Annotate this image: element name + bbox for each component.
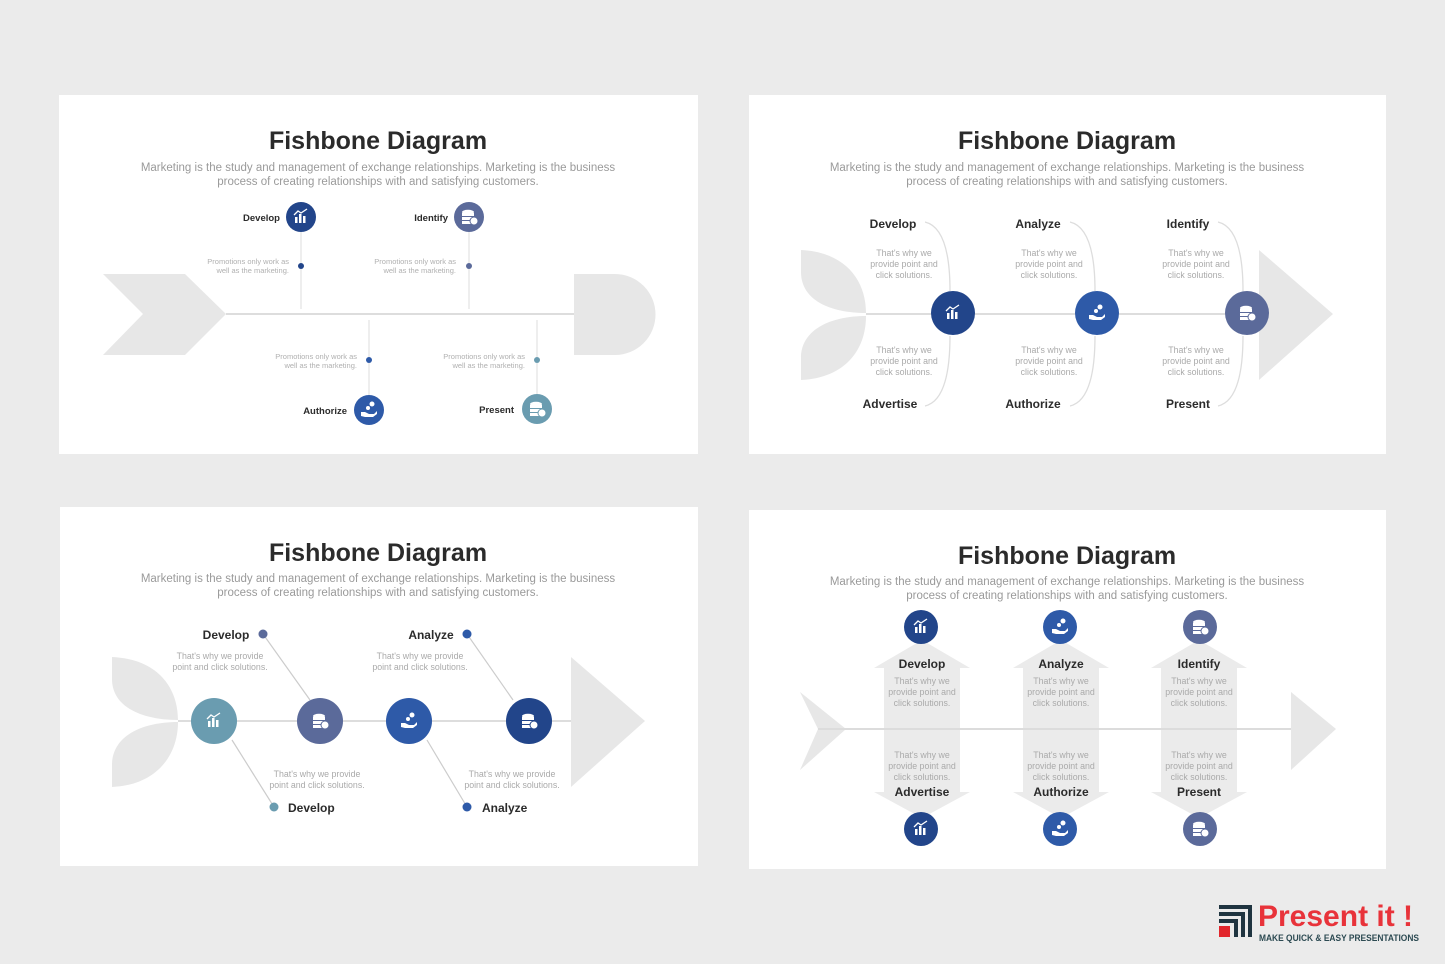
logo: MAKE QUICK & EASY PRESENTATIONS: [1259, 933, 1419, 943]
column: Identify/Present: provide point and: [1165, 687, 1233, 697]
fish head: [1291, 692, 1336, 770]
column: Identify/Present: That's why we: [1171, 676, 1227, 686]
title: Fishbone Diagram: [269, 539, 487, 567]
node: Analyze/Authorize: [1005, 217, 1119, 411]
bone: Develop: [207, 202, 316, 309]
node: Identify/Present: That's why we: [1168, 248, 1224, 258]
node: Identify/Present: click solutions.: [1168, 367, 1224, 377]
node: Develop/Advertise: That's why we: [876, 248, 932, 258]
fish head: [574, 274, 656, 355]
column: Identify/Present: click solutions.: [1171, 698, 1227, 708]
nodes: [191, 698, 552, 744]
labels: Analyze bottom: That's why we provide: [469, 769, 555, 779]
bone: Authorize: Authorize: [303, 406, 347, 417]
column: Analyze/Authorize: click solutions.: [1033, 772, 1089, 782]
panel: bottom-right fishbone: [749, 510, 1386, 869]
node: Analyze/Authorize: That's why we: [1021, 345, 1077, 355]
bone: Present: well as the marketing.: [451, 361, 525, 370]
node: Identify/Present: Identify: [1167, 217, 1210, 231]
node: Identify/Present: provide point and: [1162, 356, 1230, 366]
node: Analyze/Authorize: Analyze: [1015, 217, 1061, 231]
column: Develop/Advertise: provide point and: [888, 687, 956, 697]
labels: Analyze top: That's why we provide: [377, 651, 463, 661]
column: Develop/Advertise: provide point and: [888, 761, 956, 771]
bone: Identify: well as the marketing.: [382, 266, 456, 275]
labels: Analyze bottom: [462, 769, 560, 815]
column: Analyze/Authorize: That's why we: [1033, 750, 1089, 760]
labels: Develop bottom: [269, 769, 365, 815]
subtitle: process of creating relationships with and satisfying customers.: [906, 176, 1228, 188]
column: Analyze/Authorize: [1013, 610, 1109, 846]
title: Fishbone Diagram: [269, 127, 487, 155]
bone: Develop: Promotions only work as: [207, 257, 289, 266]
node: Develop/Advertise: click solutions.: [876, 270, 932, 280]
fish tail: [800, 692, 846, 770]
bone: Present: Present: [479, 405, 515, 416]
bone: Authorize: Promotions only work as: [275, 352, 357, 361]
labels: Develop top: [172, 628, 268, 672]
panel: top-right fishbone: [749, 95, 1386, 454]
subtitle: process of creating relationships with and satisfying customers.: [217, 587, 539, 599]
labels: Develop top: Develop: [203, 628, 249, 642]
labels: Develop top: That's why we provide: [177, 651, 263, 661]
column: Develop/Advertise: Develop: [899, 657, 945, 671]
bone: Authorize: [275, 320, 384, 425]
column: Analyze/Authorize: Authorize: [1033, 785, 1089, 799]
node: Develop/Advertise: provide point and: [870, 356, 938, 366]
labels: Analyze top: Analyze: [408, 628, 454, 642]
column: Identify/Present: That's why we: [1171, 750, 1227, 760]
bone: Authorize: well as the marketing.: [283, 361, 357, 370]
subtitle: Marketing is the study and management of exchange relationships. Marketing is the business: [830, 576, 1304, 588]
bone: Develop: well as the marketing.: [215, 266, 289, 275]
logo: [1219, 900, 1419, 943]
node: Develop/Advertise: Develop: [870, 217, 916, 231]
column: Develop/Advertise: That's why we: [894, 750, 950, 760]
subtitle: Marketing is the study and management of exchange relationships. Marketing is the business: [830, 162, 1304, 174]
subtitle: Marketing is the study and management of exchange relationships. Marketing is the business: [141, 573, 615, 585]
column: Develop/Advertise: click solutions.: [894, 698, 950, 708]
fish head: [1259, 250, 1333, 380]
node: Develop/Advertise: provide point and: [870, 259, 938, 269]
labels: Develop top: point and click solutions.: [172, 662, 268, 672]
column: Analyze/Authorize: click solutions.: [1033, 698, 1089, 708]
labels: Analyze top: [372, 628, 472, 672]
bone: Identify: Identify: [414, 213, 449, 224]
node: Identify/Present: click solutions.: [1168, 270, 1224, 280]
title: Fishbone Diagram: [958, 127, 1176, 155]
node: Identify/Present: [1162, 217, 1269, 411]
node: Analyze/Authorize: provide point and: [1015, 259, 1083, 269]
bone: Develop: Develop: [243, 213, 280, 224]
column: Analyze/Authorize: provide point and: [1027, 761, 1095, 771]
labels: Develop bottom: Develop: [288, 801, 335, 815]
column: Analyze/Authorize: Analyze: [1038, 657, 1084, 671]
node: Develop/Advertise: click solutions.: [876, 367, 932, 377]
bone: Present: Promotions only work as: [443, 352, 525, 361]
node: Develop/Advertise: Advertise: [863, 397, 918, 411]
node: Analyze/Authorize: Authorize: [1005, 397, 1061, 411]
node: Analyze/Authorize: provide point and: [1015, 356, 1083, 366]
fish tail leaves: [112, 657, 178, 787]
labels: Develop bottom: point and click solutions.: [269, 780, 365, 790]
node: Analyze/Authorize: That's why we: [1021, 248, 1077, 258]
node: Identify/Present: Present: [1166, 397, 1210, 411]
column: Identify/Present: Identify: [1178, 657, 1221, 671]
node: Analyze/Authorize: click solutions.: [1021, 270, 1077, 280]
node: Identify/Present: provide point and: [1162, 259, 1230, 269]
panel: bottom-left fishbone: [60, 507, 698, 866]
bone: Identify: [374, 202, 484, 309]
column: Analyze/Authorize: That's why we: [1033, 676, 1089, 686]
bone: Identify: Promotions only work as: [374, 257, 456, 266]
column: Identify/Present: Present: [1177, 785, 1221, 799]
logo: Present it !: [1258, 900, 1413, 933]
column: Identify/Present: click solutions.: [1171, 772, 1227, 782]
column: Analyze/Authorize: provide point and: [1027, 687, 1095, 697]
column: Identify/Present: provide point and: [1165, 761, 1233, 771]
node: Develop/Advertise: That's why we: [876, 345, 932, 355]
fish tail: [103, 274, 226, 355]
labels: Analyze bottom: point and click solutions.: [464, 780, 560, 790]
column: Develop/Advertise: Advertise: [895, 785, 950, 799]
fish tail leaves: [801, 250, 866, 380]
column: Develop/Advertise: That's why we: [894, 676, 950, 686]
node: Analyze/Authorize: click solutions.: [1021, 367, 1077, 377]
subtitle: process of creating relationships with and satisfying customers.: [906, 590, 1228, 602]
labels: Analyze bottom: Analyze: [482, 801, 528, 815]
labels: Develop bottom: That's why we provide: [274, 769, 360, 779]
bone: Present: [443, 320, 552, 424]
subtitle: process of creating relationships with and satisfying customers.: [217, 176, 539, 188]
column: Identify/Present: [1151, 610, 1247, 846]
subtitle: Marketing is the study and management of exchange relationships. Marketing is the business: [141, 162, 615, 174]
fish head: [571, 657, 645, 787]
column: Develop/Advertise: [874, 610, 970, 846]
labels: Analyze top: point and click solutions.: [372, 662, 468, 672]
node: Identify/Present: That's why we: [1168, 345, 1224, 355]
column: Develop/Advertise: click solutions.: [894, 772, 950, 782]
node: Develop/Advertise: [863, 217, 975, 411]
panel: top-left fishbone: [59, 95, 698, 454]
title: Fishbone Diagram: [958, 542, 1176, 570]
